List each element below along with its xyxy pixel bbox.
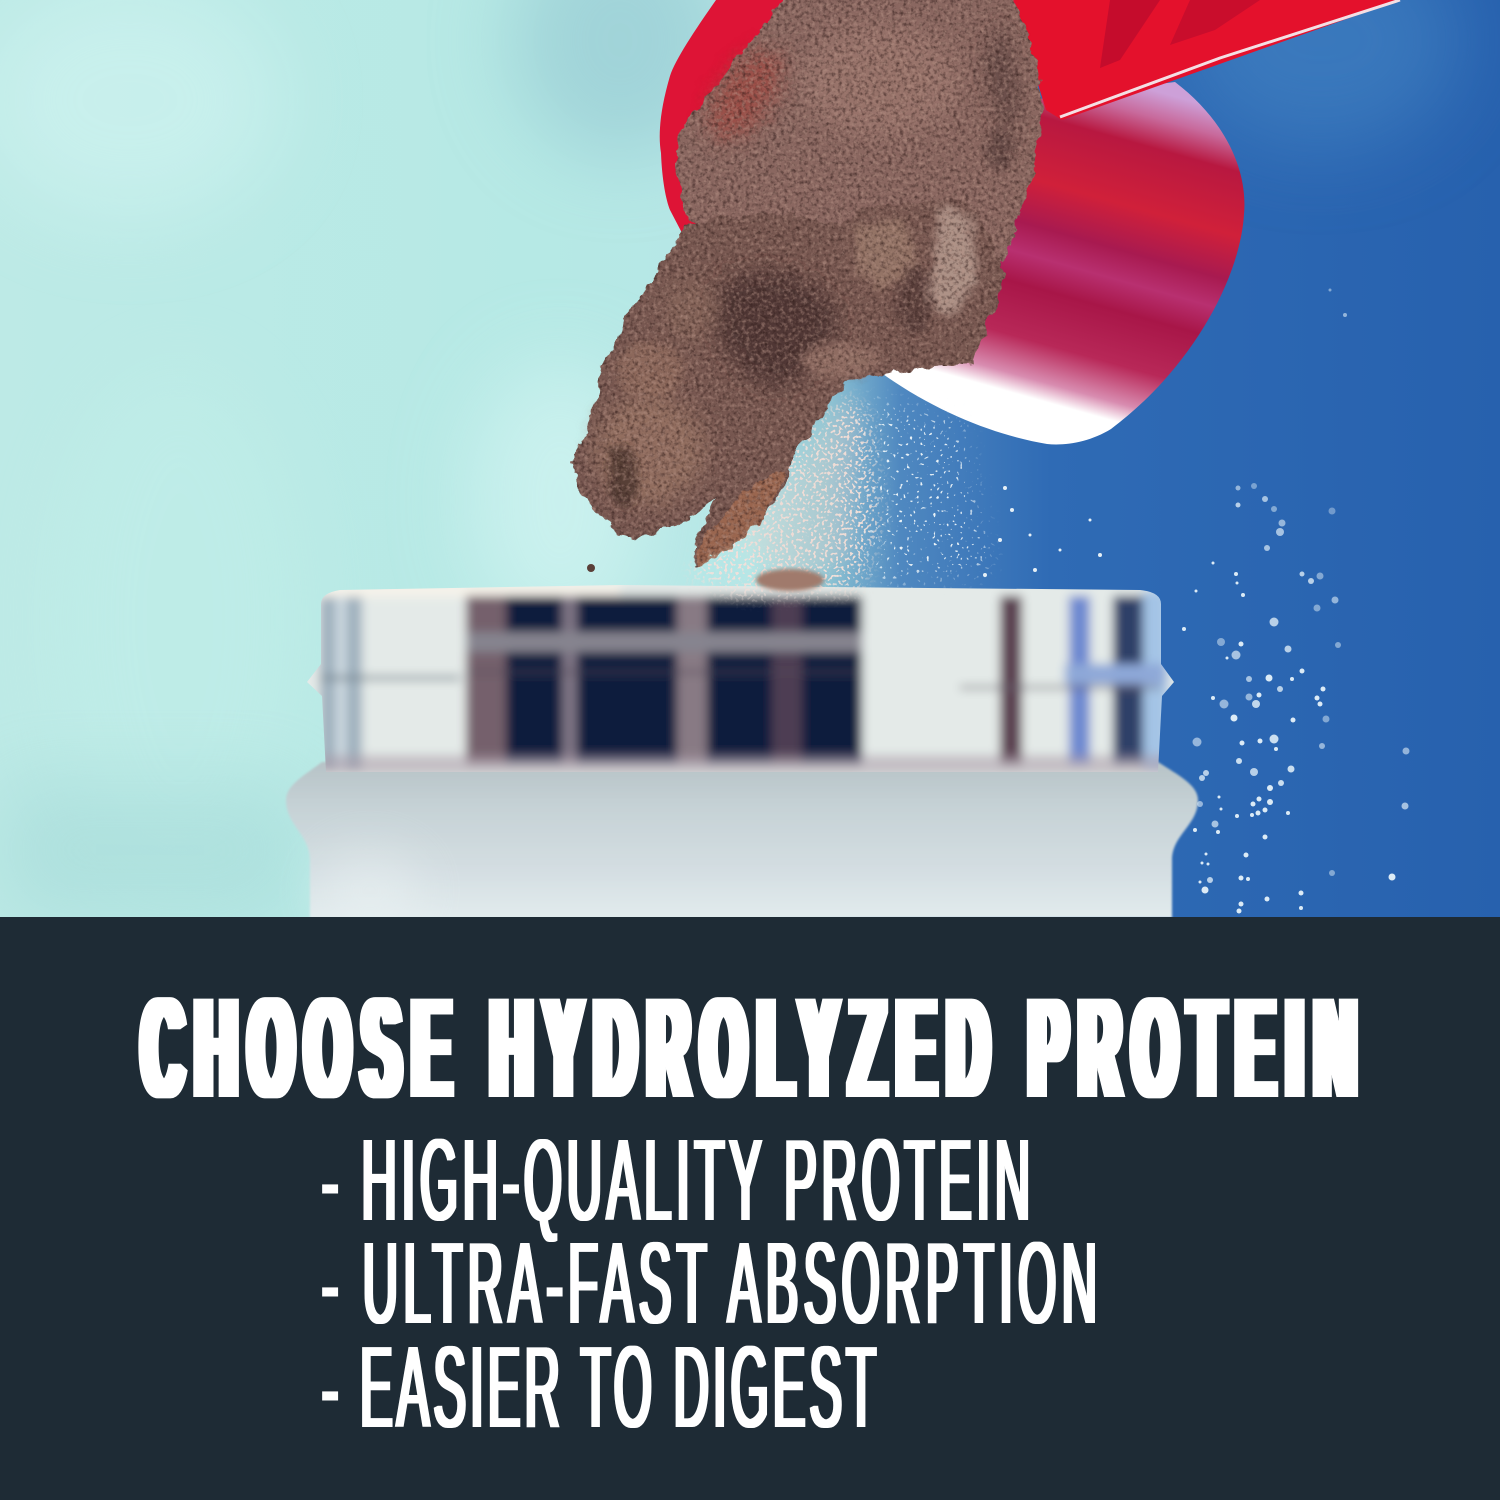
benefit: ultra-fast absorption: - ULTRA-FAST ABSORPTION <box>322 1217 1097 1348</box>
powder landing <box>756 569 824 591</box>
clump shading <box>715 271 836 386</box>
dark text panel <box>0 917 1500 1500</box>
powder in scoop <box>677 0 1042 260</box>
benefit: high-quality protein: - HIGH-QUALITY PROTEIN <box>322 1114 1030 1245</box>
white powder particles, right side <box>1182 288 1410 914</box>
red scoop <box>660 0 1400 444</box>
white powder stream <box>690 395 880 595</box>
heading: CHOOSE HYDROLYZED PROTEIN <box>142 968 1356 1129</box>
right reflections <box>1000 596 1022 764</box>
benefit: easier to digest: - EASIER TO DIGEST <box>322 1321 876 1452</box>
photo background <box>0 0 1500 920</box>
falling clump <box>573 199 1003 566</box>
scattered particles near scoop <box>860 400 1102 585</box>
scoop handle <box>1012 0 1400 120</box>
powder tub <box>280 570 1200 930</box>
metal lid <box>307 585 1174 772</box>
tub body <box>286 762 1198 918</box>
dark reflection <box>466 596 862 764</box>
scoop rim <box>660 0 1040 233</box>
scoop cup <box>880 82 1244 444</box>
benefits list <box>322 1114 1097 1452</box>
pouring powder <box>573 0 1042 595</box>
